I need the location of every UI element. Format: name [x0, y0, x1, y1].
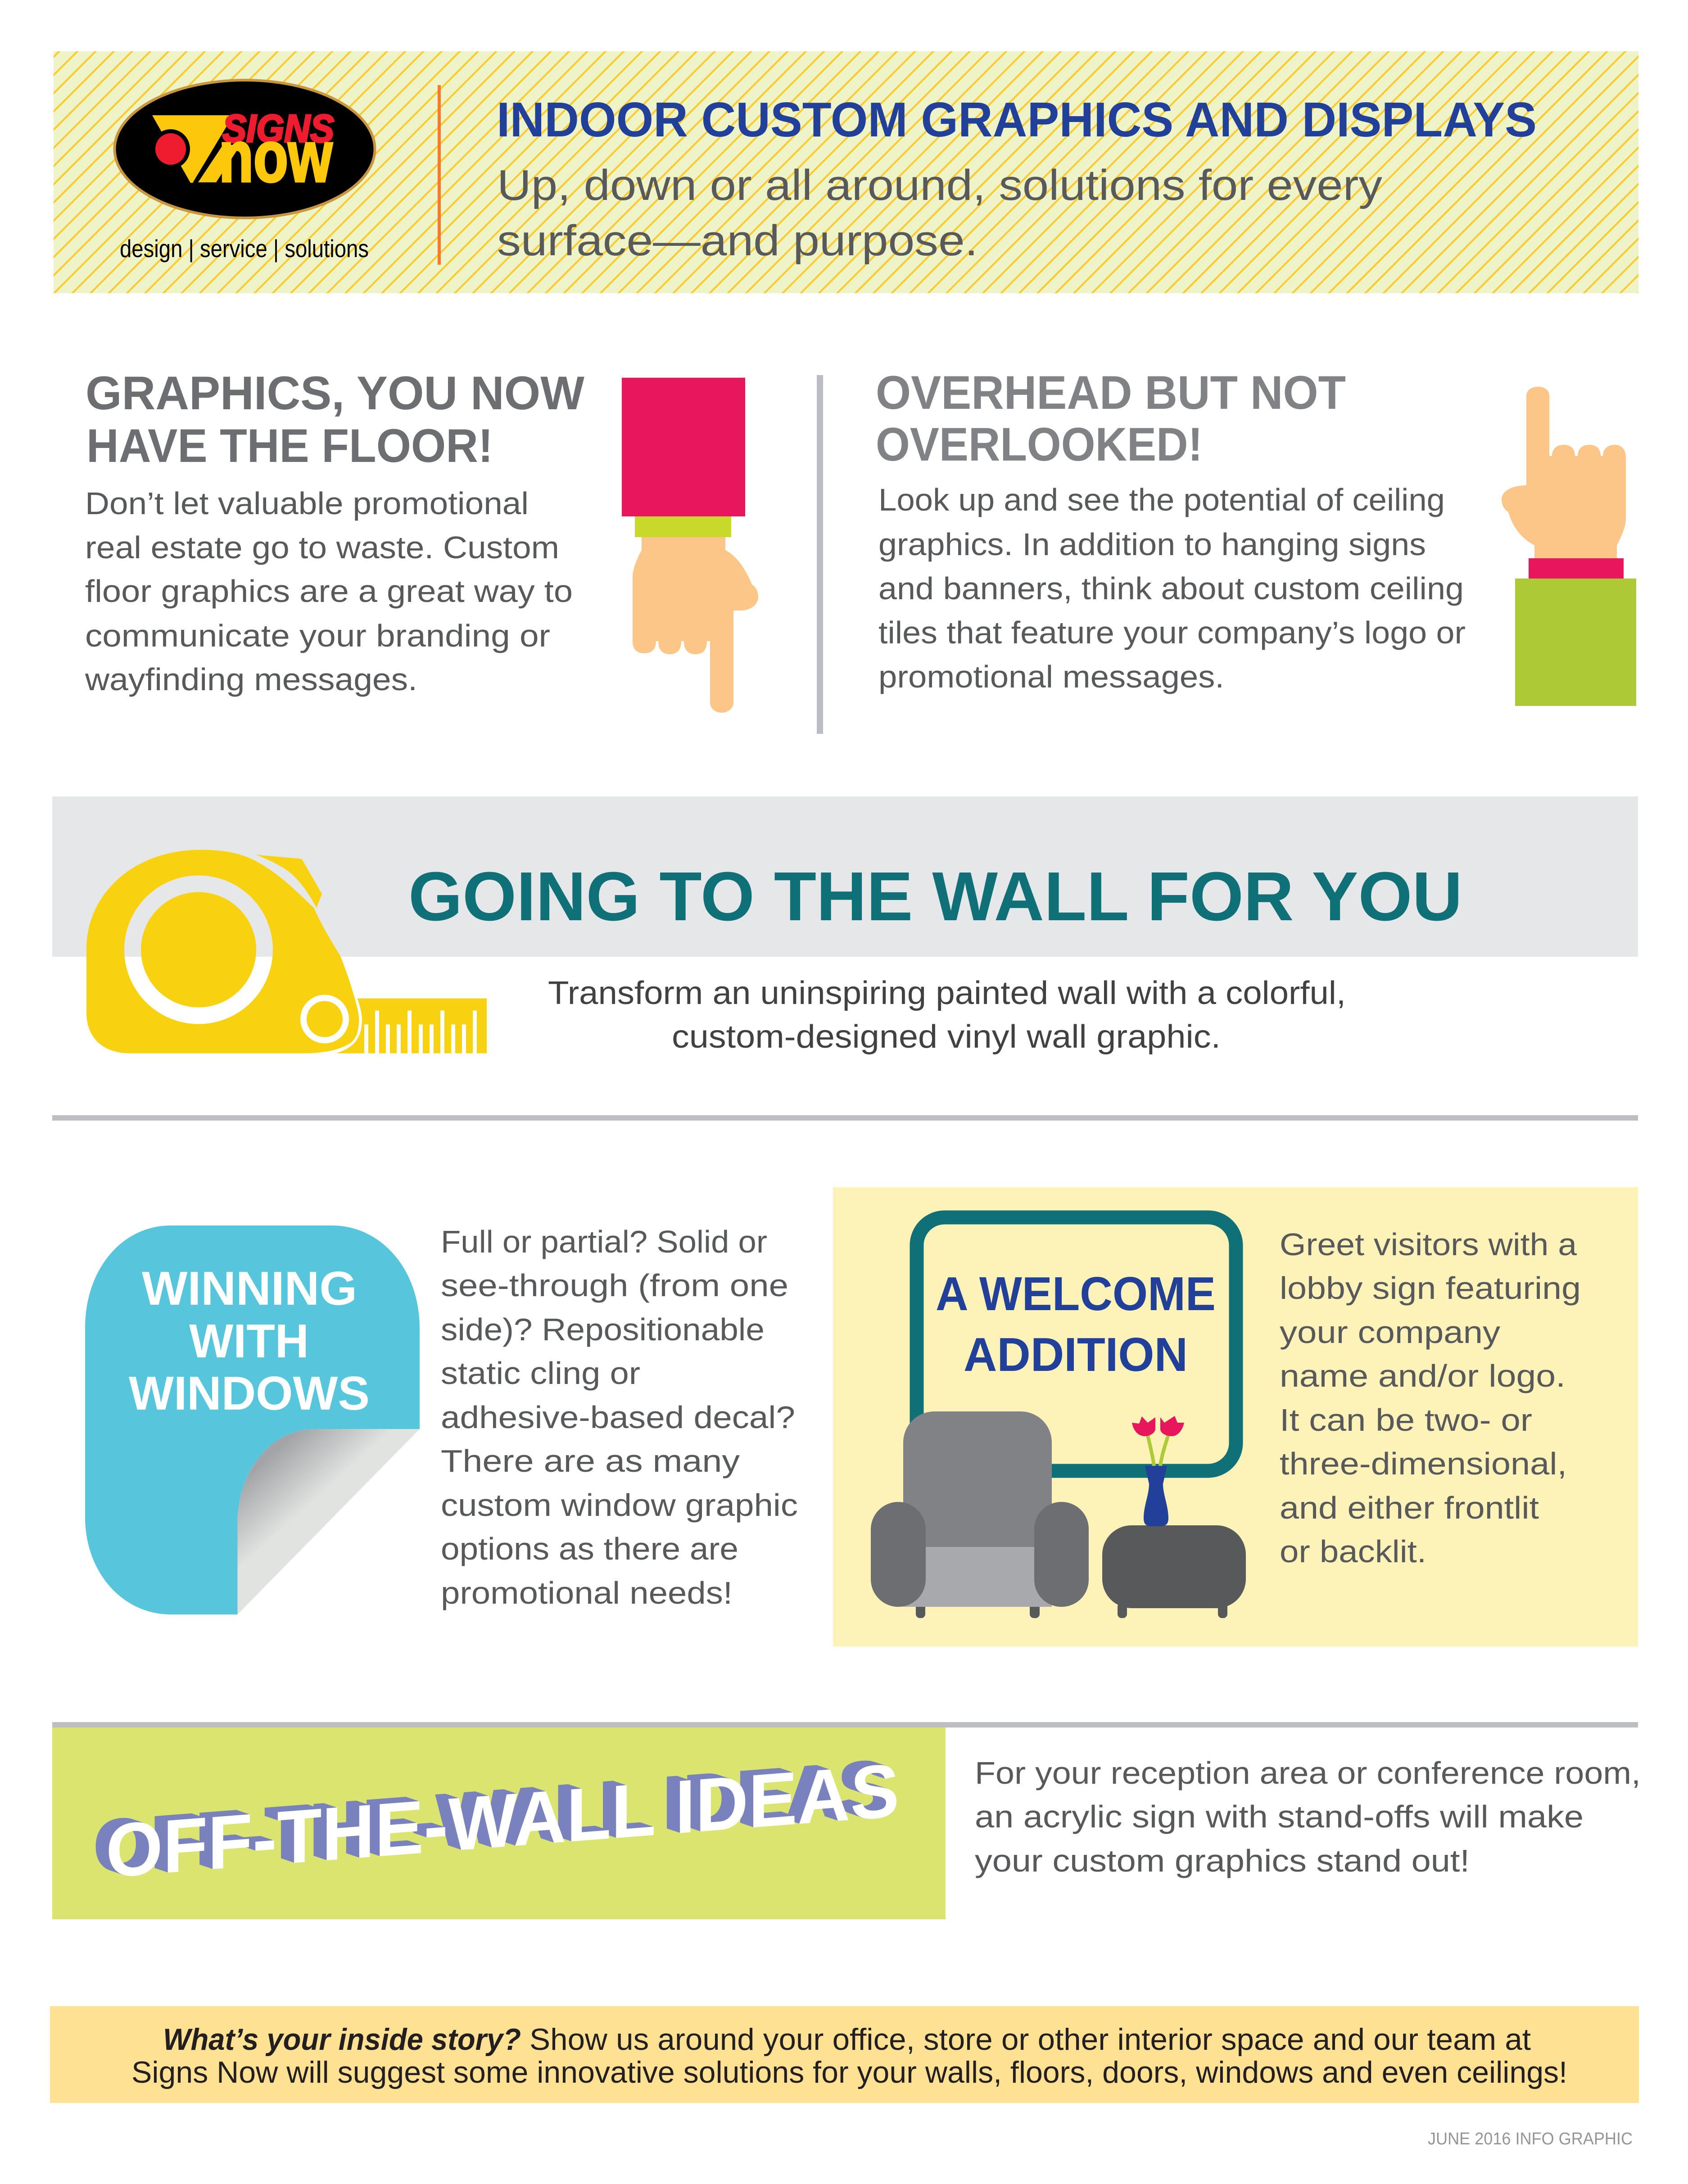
- heading: going to the wall: GOING TO THE WALL FOR YOU: [408, 858, 1462, 935]
- text: windows body: custom window graphic: [441, 1488, 798, 1523]
- subtitle: [497, 161, 1382, 265]
- header divider: [438, 85, 441, 265]
- heading: winning with windows: [129, 1262, 370, 1420]
- text: welcome body: Greet visitors with a: [1280, 1227, 1577, 1262]
- subtitle: Up, down or all around, solutions for every: [497, 161, 1382, 209]
- text: welcome body: or backlit.: [1280, 1534, 1426, 1569]
- heading: off-the-wall ideas: OFF-THE-WALL IDEAS: [106, 1748, 899, 1894]
- text: windows body: [441, 1224, 798, 1610]
- icon: hand pointing down: [622, 378, 758, 713]
- panel: winning with windows: [85, 1224, 798, 1614]
- icon: sign frame: [917, 1217, 1236, 1471]
- heading: ceiling: OVERHEAD BUT NOT: [876, 366, 1346, 419]
- text: inside story: Signs Now will suggest some innovative solutions for your walls, floors, doors, windows and even ceilings!: [131, 2055, 1567, 2089]
- heading: floor: HAVE THE FLOOR!: [86, 420, 493, 472]
- heading: a welcome addition: [936, 1267, 1216, 1381]
- text: ceiling body: [878, 482, 1466, 694]
- text: inside story: Show us around your office, store or other interior space and our team at: [529, 2022, 1531, 2057]
- panel: going to the wall: [52, 796, 1638, 1055]
- subtitle: surface—and purpose.: [497, 217, 978, 265]
- heading: ceiling: OVERLOOKED!: [876, 418, 1203, 471]
- heading: ceiling: [876, 366, 1346, 471]
- panel: a welcome addition: [833, 1187, 1638, 1646]
- text: welcome body: name and/or logo.: [1280, 1358, 1566, 1393]
- title: INDOOR CUSTOM GRAPHICS AND DISPLAYS: [497, 92, 1537, 147]
- text: floor body: communicate your branding or: [85, 618, 550, 653]
- text: windows body: There are as many: [441, 1443, 740, 1479]
- text: inside story: [131, 2022, 1567, 2089]
- text: welcome body: three-dimensional,: [1280, 1446, 1567, 1481]
- text: off-the-wall body: an acrylic sign with stand-offs will make: [975, 1799, 1584, 1834]
- text: ceiling body: Look up and see the potential of ceiling: [878, 482, 1445, 517]
- logo: Signs Now: now: [219, 116, 333, 197]
- heading: a welcome addition: ADDITION: [964, 1328, 1188, 1381]
- icon: peeling sticker: [85, 1225, 420, 1614]
- text: inside story: What’s your inside story?: [163, 2022, 521, 2057]
- text: windows body: static cling or: [441, 1356, 640, 1391]
- text: welcome body: lobby sign featuring: [1280, 1271, 1581, 1306]
- text: ceiling body: graphics. In addition to hanging signs: [878, 527, 1426, 562]
- grey heading band: [52, 796, 1638, 957]
- text: floor body: [85, 486, 573, 697]
- text: welcome body: It can be two- or: [1280, 1402, 1532, 1438]
- text: windows body: side)? Repositionable: [441, 1312, 765, 1347]
- heading: winning with windows: WINDOWS: [129, 1367, 370, 1420]
- icon: hand pointing up: [1502, 387, 1636, 706]
- logo: Signs Now: [114, 80, 375, 218]
- text: windows body: adhesive-based decal?: [441, 1400, 795, 1435]
- text: floor body: Don’t let valuable promotional: [85, 486, 529, 521]
- heading: winning with windows: WITH: [189, 1315, 309, 1368]
- text: windows body: Full or partial? Solid or: [441, 1224, 767, 1259]
- text: floor body: real estate go to waste. Custom: [85, 530, 559, 565]
- text: off-the-wall body: [975, 1755, 1641, 1878]
- text: windows body: see-through (from one: [441, 1268, 788, 1303]
- text: ceiling body: tiles that feature your company’s logo or: [878, 615, 1466, 650]
- heading: a welcome addition: A WELCOME: [936, 1267, 1216, 1320]
- text: welcome body: [1280, 1227, 1581, 1569]
- logo: Signs Now: SIGNS: [222, 107, 334, 150]
- text: wall body: [548, 975, 1346, 1055]
- icon: side table with vase: [1102, 1416, 1246, 1618]
- panel: off-the-wall background: [52, 1727, 946, 1919]
- text: floor body: floor graphics are a great way to: [85, 574, 573, 609]
- heading: floor: [86, 367, 584, 472]
- heading: winning with windows: WINNING: [142, 1262, 357, 1315]
- icon: armchair: [871, 1411, 1089, 1618]
- text: ceiling body: promotional messages.: [878, 659, 1224, 694]
- text: off-the-wall body: For your reception area or conference room,: [975, 1755, 1641, 1791]
- heading: floor: GRAPHICS, YOU NOW: [86, 367, 584, 420]
- panel: ceiling graphics: [876, 366, 1636, 706]
- text: windows body: promotional needs!: [441, 1575, 733, 1610]
- text: wall body: custom-designed vinyl wall graphic.: [672, 1019, 1221, 1055]
- panel: floor graphics: [85, 367, 758, 713]
- footnote: JUNE 2016 INFO GRAPHIC: [1428, 2130, 1633, 2148]
- text: welcome body: your company: [1280, 1315, 1500, 1350]
- logo tagline: design | service | solutions: [120, 235, 369, 262]
- text: windows body: options as there are: [441, 1531, 738, 1566]
- icon: tape measure: [86, 850, 487, 1054]
- text: wall body: Transform an uninspiring painted wall with a colorful,: [548, 975, 1346, 1011]
- panel: footer call to action: [50, 2006, 1639, 2103]
- text: welcome body: and either frontlit: [1280, 1490, 1539, 1525]
- text: ceiling body: and banners, think about custom ceiling: [878, 571, 1464, 606]
- text: floor body: wayfinding messages.: [85, 662, 417, 697]
- text: off-the-wall body: your custom graphics stand out!: [975, 1843, 1470, 1878]
- panel: header banner: [54, 51, 1638, 293]
